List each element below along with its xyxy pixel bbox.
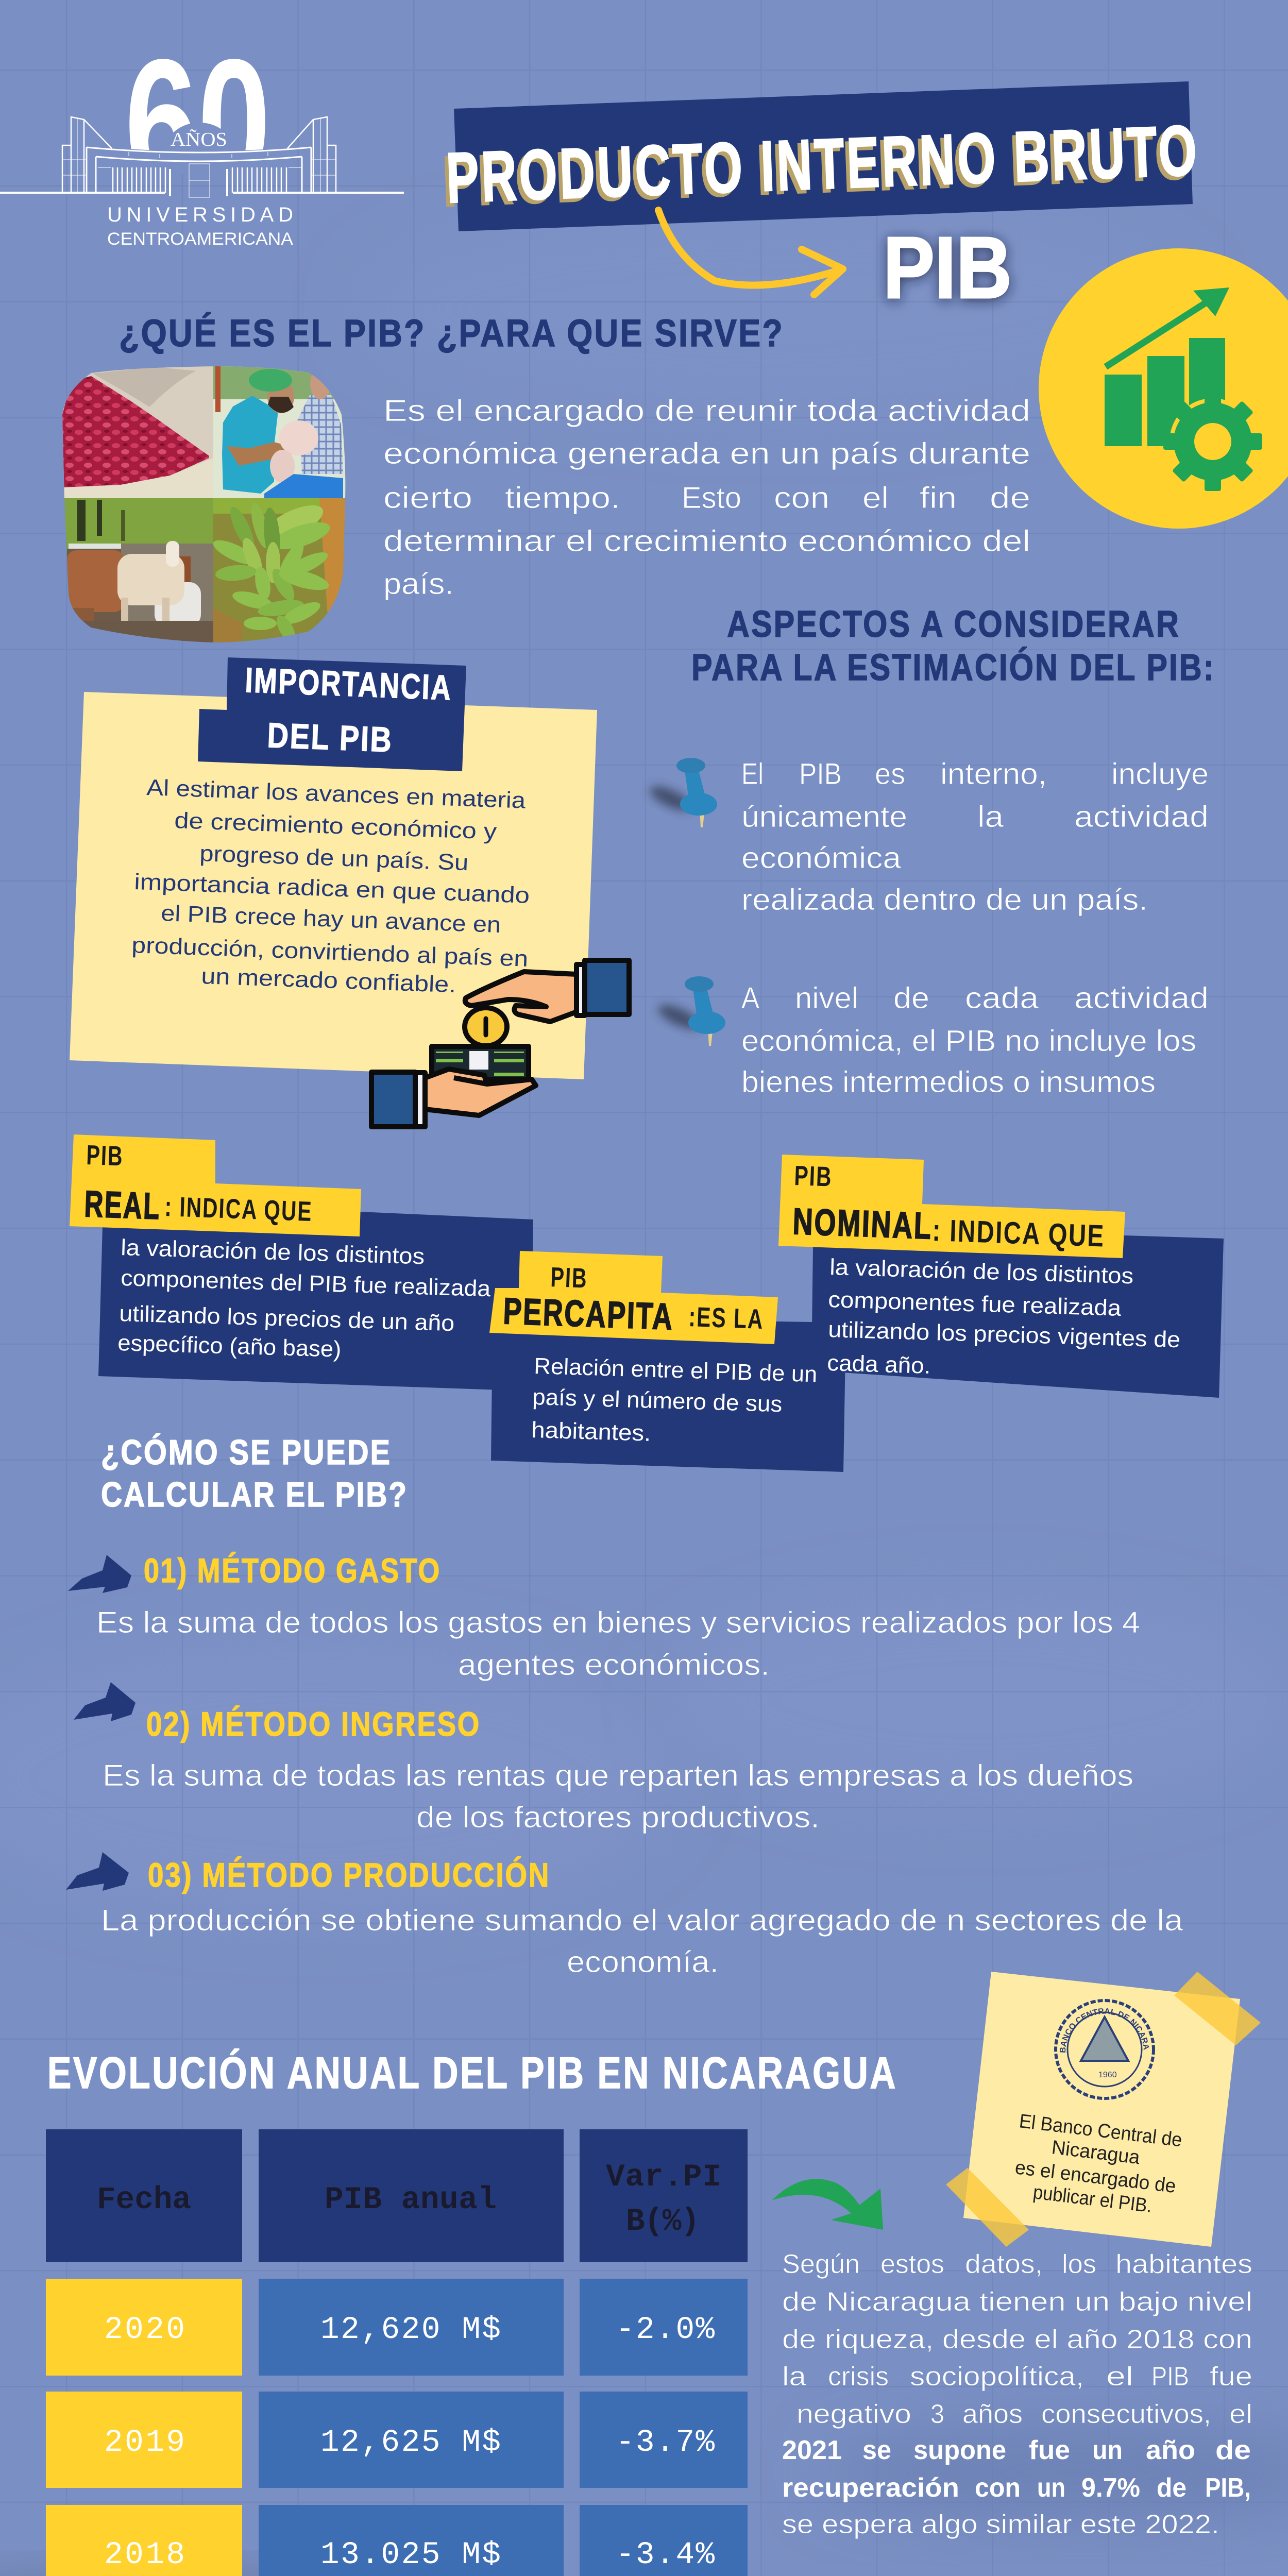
table header: PIB anual (325, 2182, 497, 2218)
arrow: method 1 (68, 1555, 131, 1593)
note text: Nicaragua (1050, 2137, 1142, 2168)
logo: university name: UNIVERSIDAD (107, 204, 293, 226)
text block: analysis: fue (1029, 2435, 1070, 2465)
heading: how to calculate: ¿CÓMO SE PUEDE (101, 1433, 392, 1472)
method 1 text (96, 1606, 1140, 1682)
text block: what is GDP: cierto (383, 481, 472, 515)
text block: analysis: el (1229, 2399, 1252, 2429)
importance text: de crecimiento económico y (174, 808, 497, 844)
logo number 60: 60 (125, 23, 270, 221)
text block: aspect 1: económica (741, 841, 902, 875)
text block: what is GDP: económica generada en un país durante (383, 437, 1030, 470)
text block: aspect 2: A (741, 981, 759, 1015)
row 2018 (46, 2505, 748, 2576)
text block: aspect 1: interno, (940, 757, 1047, 791)
method 3 text: La producción se obtiene sumando el valor agregado de n sectores de la (101, 1904, 1183, 1937)
text block: aspect 2 (741, 981, 1209, 1099)
text block: analysis: supone (913, 2435, 1006, 2465)
text block: analysis: año (1146, 2435, 1195, 2465)
text block: analysis (782, 2249, 1252, 2539)
text block: analysis: los (1062, 2249, 1096, 2279)
per capita GDP label: :ES LA (688, 1301, 765, 1335)
text block: what is GDP: determinar el crecimiento económico del (383, 524, 1030, 558)
per capita GDP text: país y el número de sus (532, 1384, 783, 1417)
arrow: method 2 (74, 1682, 135, 1721)
text block: analysis: PIB, (1205, 2473, 1251, 2503)
method 2 text (103, 1759, 1133, 1834)
coin (465, 1008, 507, 1046)
text block: aspect 2: económica, el PIB no incluye los (741, 1024, 1196, 1058)
row 2020: 2020 (104, 2312, 185, 2348)
nominal GDP text: cada año. (827, 1350, 931, 1379)
importance text: el PIB crece hay un avance en (161, 901, 501, 938)
cattle (59, 498, 213, 645)
bananas (210, 498, 347, 645)
text block: aspect 2: actividad (1074, 981, 1209, 1015)
text block: what is GDP (383, 394, 1030, 601)
text block: what is GDP: fin (920, 481, 957, 515)
logo: building line drawing (0, 117, 404, 197)
importance text (131, 775, 530, 997)
method 3 text (101, 1904, 1183, 1979)
heading: what is GDP: ¿QUÉ ES EL PIB? ¿PARA QUE SIRVE? (119, 312, 784, 354)
text block: aspect 2: bienes intermedios o insumos (741, 1065, 1156, 1099)
method 3 text: economía. (567, 1945, 719, 1979)
real GDP label: : INDICA QUE (164, 1191, 313, 1227)
arrow: green curved (772, 2179, 883, 2230)
seal of the central bank: BANCO CENTRAL DE NICARAGUA (1059, 2008, 1149, 2053)
heading: annual evolution: EVOLUCIÓN ANUAL DEL PIB EN NICARAGUA (47, 2048, 897, 2098)
row 2018: 2018 (104, 2537, 185, 2573)
seal of the central bank (1054, 1999, 1155, 2100)
text block: analysis: la (782, 2362, 806, 2392)
nominal GDP label: : INDICA QUE (932, 1213, 1106, 1253)
text block: analysis: el (1106, 2362, 1133, 2392)
nominal GDP text: utilizando los precios vigentes de (828, 1317, 1181, 1352)
table header: Fecha (97, 2182, 191, 2218)
text block: analysis: Según (782, 2249, 860, 2279)
icon: growth chart with gear (1039, 248, 1288, 529)
row 2020 (46, 2279, 748, 2376)
method 1 heading: 01) MÉTODO GASTO (144, 1551, 441, 1589)
real GDP label (70, 1134, 361, 1236)
nominal GDP label: NOMINAL (792, 1201, 933, 1247)
seal of the central bank: 1960 (1098, 2071, 1117, 2079)
upper hand (465, 960, 629, 1022)
text block: analysis: de (1157, 2473, 1187, 2503)
text block: analysis: un (1037, 2473, 1065, 2503)
text block: analysis: 9.7% (1081, 2473, 1140, 2503)
panel: importance note (70, 657, 597, 1079)
nominal GDP text: la valoración de los distintos (829, 1255, 1134, 1289)
per capita GDP text: habitantes. (531, 1417, 651, 1446)
text block: analysis: crisis (828, 2362, 889, 2392)
nominal GDP text: componentes fue realizada (828, 1287, 1122, 1321)
text block: what is GDP: tiempo. (505, 481, 620, 515)
text block: what is GDP: el (862, 481, 889, 515)
real GDP text: específico (año base) (117, 1330, 342, 1362)
real GDP text: utilizando los precios de un año (119, 1301, 455, 1336)
note text: publicar el PIB. (1032, 2181, 1153, 2217)
text block: what is GDP: Esto (682, 481, 741, 515)
heading: aspects to consider: ASPECTOS A CONSIDERAR (727, 604, 1180, 645)
real GDP text: la valoración de los distintos (121, 1235, 425, 1269)
note text: El Banco Central de (1018, 2110, 1183, 2151)
importance text: Al estimar los avances en materia (146, 775, 527, 814)
per capita GDP label: PIB (550, 1262, 588, 1294)
icon: pin 2 (655, 976, 725, 1046)
text block: what is GDP: país. (383, 567, 454, 601)
real GDP text (117, 1235, 491, 1362)
farmer holding piglet (213, 363, 347, 498)
text block: analysis: consecutivos, (1041, 2399, 1211, 2429)
text block: analysis: de (1215, 2435, 1251, 2465)
note text (1014, 2110, 1183, 2217)
heading: aspects to consider (691, 604, 1215, 688)
method 1 text: agentes económicos. (458, 1648, 770, 1682)
text block: analysis: de Nicaragua tienen un bajo nivel (782, 2287, 1252, 2317)
per capita GDP label (489, 1251, 778, 1344)
tape bottom (946, 2168, 1029, 2247)
importance heading label: DEL PIB (266, 716, 394, 759)
beans in sack (59, 363, 213, 498)
table header (46, 2129, 748, 2262)
text block: analysis: se espera algo similar este 2022. (782, 2510, 1219, 2539)
method 2 text: Es la suma de todas las rentas que reparten las empresas a los dueños (103, 1759, 1133, 1792)
nominal GDP label (778, 1155, 1125, 1258)
text block: analysis: 3 (930, 2399, 944, 2429)
text block: aspect 1: incluye (1111, 757, 1209, 791)
per capita GDP text: Relación entre el PIB de un (534, 1353, 818, 1387)
row 2019: 2019 (104, 2425, 185, 2461)
real GDP text: componentes del PIB fue realizada (121, 1265, 491, 1301)
row 2018: -3.4% (616, 2537, 715, 2573)
panel: per capita GDP (489, 1251, 846, 1472)
row 2019 (46, 2392, 748, 2488)
text block: aspect 1: la (977, 800, 1004, 834)
row 2019: -3.7% (616, 2425, 715, 2461)
title banner (441, 81, 1200, 231)
tape top (1174, 1972, 1261, 2045)
per capita GDP text (531, 1353, 818, 1446)
method 2 text: de los factores productivos. (416, 1801, 820, 1834)
text block: aspect 2: nivel (795, 981, 858, 1015)
row 2020: 12,620 M$ (320, 2312, 501, 2348)
text block: analysis: datos, (965, 2249, 1043, 2279)
text block: analysis: 2021 (782, 2435, 842, 2465)
nominal GDP label: PIB (794, 1160, 833, 1193)
text block: analysis: años (962, 2399, 1023, 2429)
bills (432, 1046, 529, 1079)
photo collage: agriculture (59, 363, 347, 645)
importance text: un mercado confiable. (201, 963, 456, 997)
panel: real GDP (70, 1134, 533, 1391)
text block: analysis: se (862, 2435, 891, 2465)
text block: what is GDP: con (774, 481, 829, 515)
logo: university name second line: CENTROAMERICANA (107, 229, 293, 249)
row 2019: 12,625 M$ (320, 2425, 501, 2461)
text block: aspect 1: El (741, 757, 764, 791)
arrow: method 3 (66, 1852, 129, 1891)
text block: analysis: sociopolítica, (910, 2362, 1084, 2392)
table: GDP by year (46, 2129, 748, 2576)
importance text: progreso de un país. Su (199, 841, 469, 875)
logo: Universidad Centroamericana 60 años (0, 59, 404, 245)
text block: aspect 1: es (875, 757, 905, 791)
text block: analysis: negativo (796, 2399, 911, 2429)
nominal GDP text (827, 1255, 1181, 1379)
text block: what is GDP: Es el encargado de reunir toda actividad (383, 394, 1030, 428)
row 2020: -2.0% (616, 2312, 715, 2348)
heading: how to calculate: CALCULAR EL PIB? (101, 1475, 408, 1514)
gear (1163, 392, 1262, 491)
icon: pin 1 (647, 758, 717, 827)
text block: analysis: de riqueza, desde el año 2018 con (782, 2325, 1252, 2354)
importance text: importancia radica en que cuando (134, 869, 530, 908)
text block: aspect 2: cada (965, 981, 1039, 1015)
text block: aspect 1 (741, 757, 1209, 917)
importance heading label (198, 657, 466, 771)
acronym PIB: PIB (883, 219, 1012, 317)
text block: aspect 1: únicamente (741, 800, 907, 834)
text block: analysis: fue (1210, 2362, 1252, 2392)
arrow: title to PIB (658, 210, 843, 295)
text block: analysis: PIB (1151, 2362, 1189, 2392)
method 2 heading: 02) MÉTODO INGRESO (146, 1705, 481, 1743)
method 3 heading: 03) MÉTODO PRODUCCIÓN (148, 1856, 550, 1894)
text block: aspect 1: actividad (1074, 800, 1209, 834)
text block: aspect 2: de (893, 981, 929, 1015)
lower hand (371, 1069, 536, 1127)
icon: hands exchanging coin and bill (371, 960, 629, 1127)
panel: nominal GDP (778, 1155, 1224, 1398)
note text: es el encargado de (1014, 2157, 1177, 2197)
table header: B(%) (626, 2204, 700, 2240)
method 1 text: Es la suma de todos los gastos en bienes y servicios realizados por los 4 (96, 1606, 1140, 1639)
importance text: producción, convirtiendo al país en (131, 933, 529, 972)
text block: analysis: habitantes (1115, 2249, 1252, 2279)
text block: aspect 1: realizada dentro de un país. (741, 883, 1148, 917)
text block: analysis: un (1092, 2435, 1123, 2465)
text block: analysis: con (975, 2473, 1021, 2503)
logo: años label: AÑOS (171, 129, 227, 150)
real GDP label: PIB (86, 1140, 124, 1172)
text block: what is GDP: de (990, 481, 1030, 515)
per capita GDP label: PERCAPITA (502, 1291, 674, 1338)
text block: analysis: recuperación (782, 2473, 959, 2503)
row 2018: 13.025 M$ (320, 2537, 501, 2573)
table header: Var.PI (606, 2160, 721, 2195)
real GDP label: REAL (83, 1183, 161, 1227)
text block: analysis: estos (880, 2249, 944, 2279)
heading: how to calculate (101, 1433, 408, 1514)
text block: aspect 1: PIB (799, 757, 842, 791)
importance heading label: IMPORTANCIA (244, 660, 453, 707)
